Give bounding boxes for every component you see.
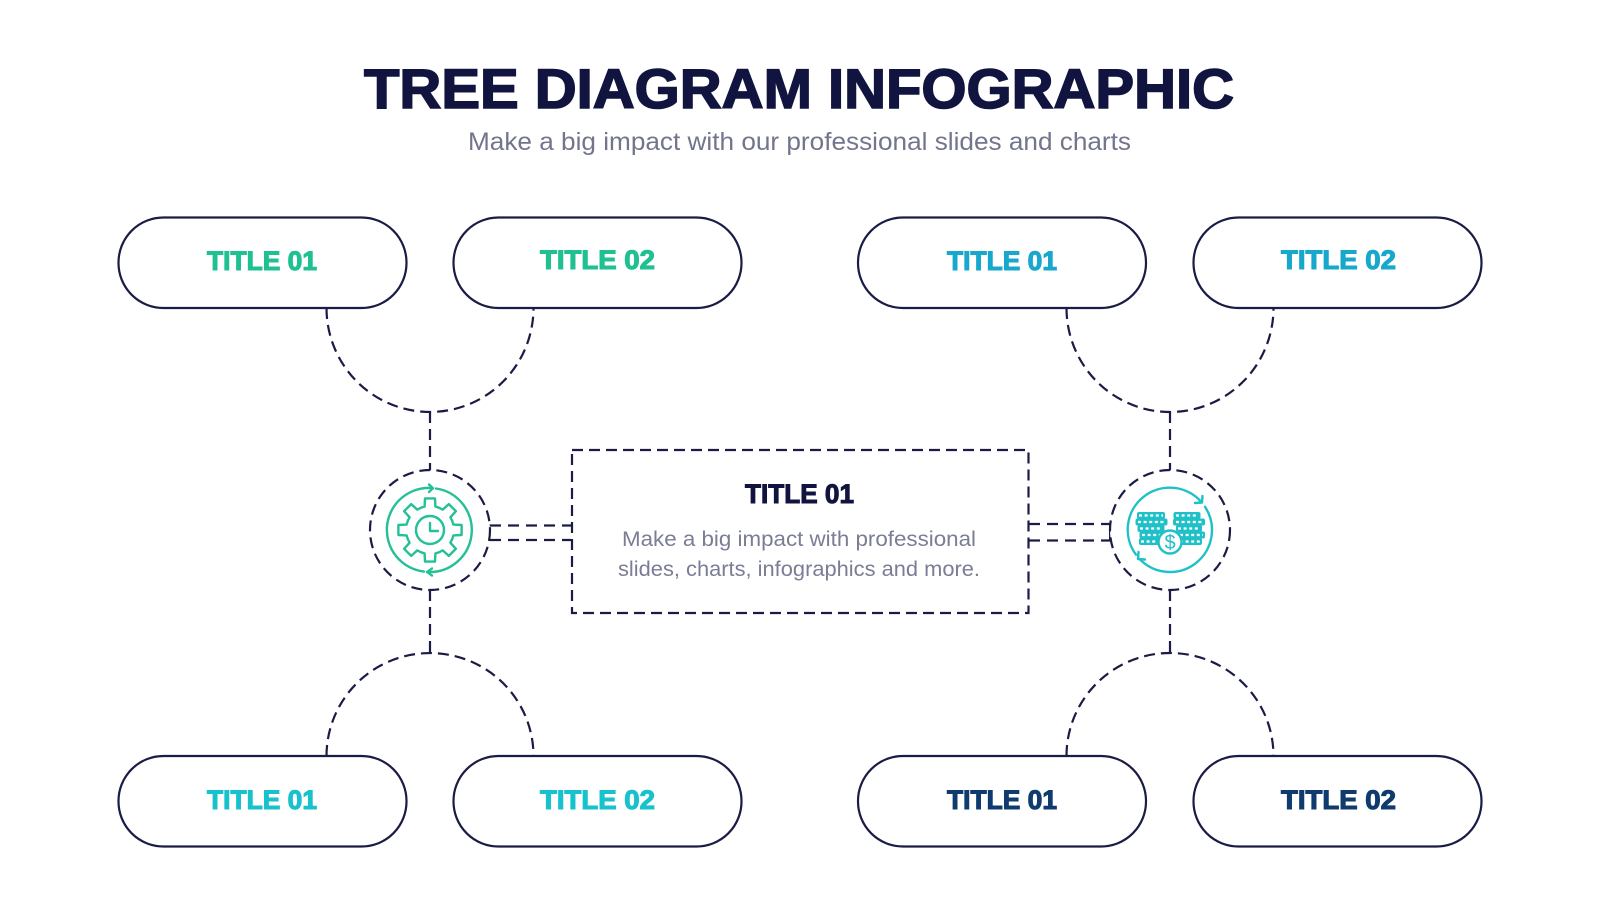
pill: top right title 02: TITLE 02 — [1281, 245, 1396, 275]
centre body text: Make a big impact with professional — [622, 528, 976, 551]
pill: top right title 02 — [1194, 218, 1482, 308]
icon: gear with clock — [370, 470, 490, 590]
subtitle: Make a big impact with our professional slides and charts — [468, 128, 1131, 156]
title: TREE DIAGRAM INFOGRAPHIC — [364, 57, 1234, 120]
icon: coin stacks with dollar: $ — [1164, 532, 1176, 554]
pill: top right title 01: TITLE 01 — [947, 246, 1057, 276]
pill: bottom right title 02: TITLE 02 — [1281, 785, 1396, 815]
pill: top left title 01: TITLE 01 — [207, 246, 317, 276]
pill: top left title 01 — [118, 218, 406, 308]
pill: bottom right title 02 — [1194, 756, 1482, 846]
centre body text — [618, 528, 980, 581]
centre body text: slides, charts, infographics and more. — [618, 558, 980, 581]
icon: coin stacks with dollar — [1110, 470, 1230, 590]
pill: bottom left title 01: TITLE 01 — [207, 785, 317, 815]
connector: bottom right arc — [1066, 590, 1274, 756]
pill: bottom right title 01 — [858, 756, 1146, 846]
connector: top left arc — [326, 308, 534, 470]
centre heading: TITLE 01 — [745, 479, 854, 509]
connector: left double dashed lines — [489, 524, 571, 541]
pill: top left title 02: TITLE 02 — [540, 245, 655, 275]
pill: top right title 01 — [858, 218, 1146, 308]
connector: bottom left arc — [326, 590, 534, 756]
connector: right double dashed lines — [1029, 524, 1110, 541]
pill: bottom right title 01: TITLE 01 — [947, 785, 1057, 815]
pill: top left title 02 — [454, 218, 742, 308]
pill: bottom left title 02: TITLE 02 — [540, 785, 655, 815]
connector: top right arc — [1066, 308, 1274, 470]
pill: bottom left title 02 — [454, 756, 742, 846]
pill: bottom left title 01 — [118, 756, 406, 846]
panel: centre text box — [572, 450, 1028, 613]
